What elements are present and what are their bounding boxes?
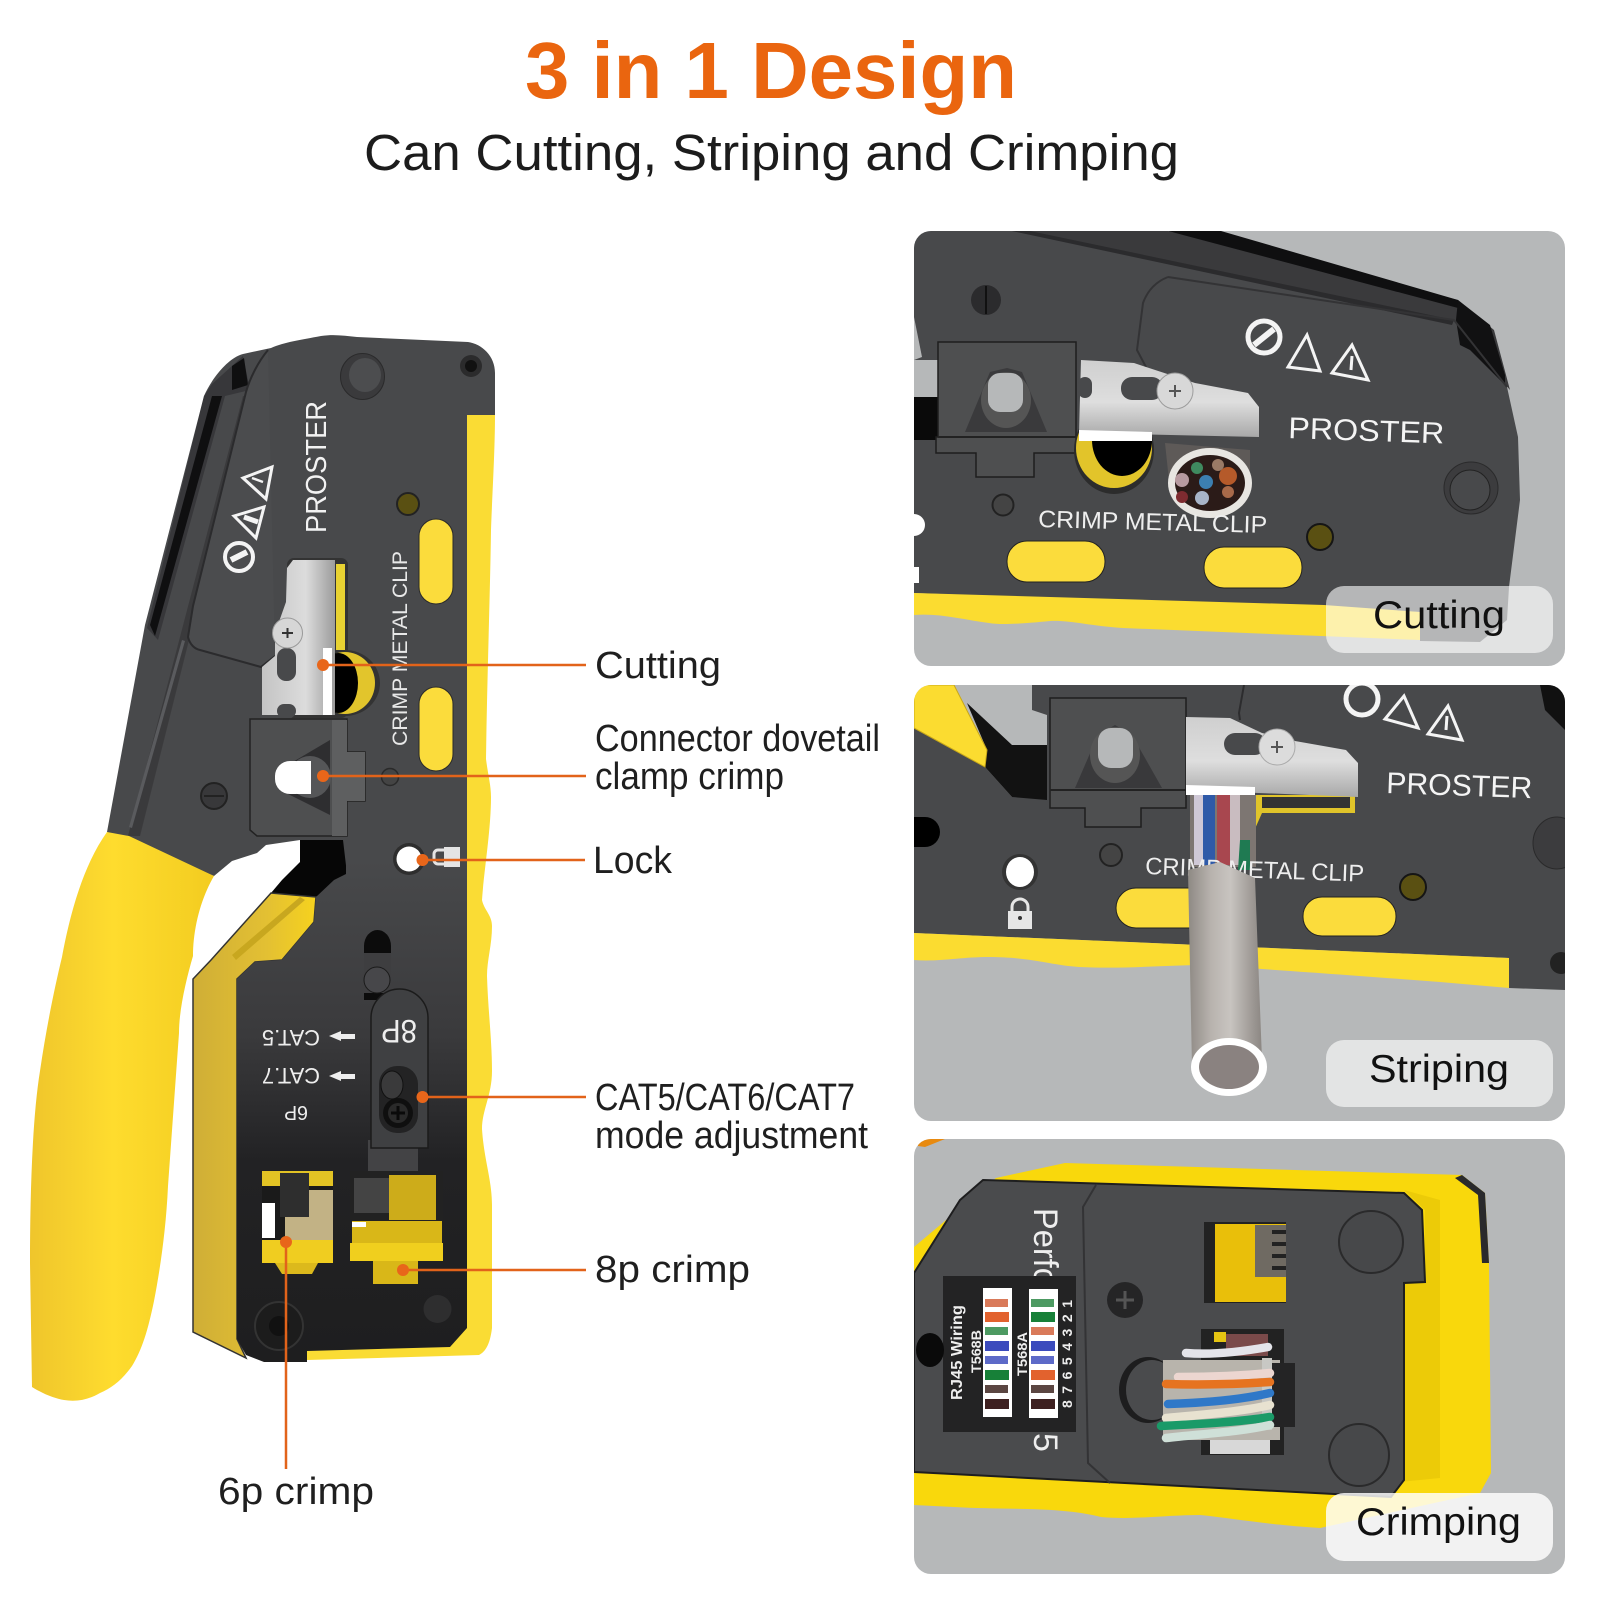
rivet: [340, 354, 384, 400]
main tool illustration: [30, 335, 495, 1401]
label pill: [1326, 1040, 1553, 1107]
upper port: [1204, 1222, 1286, 1303]
lower body panel: [237, 860, 467, 1362]
screw: [971, 285, 1001, 315]
yellow oval windows: [419, 519, 453, 771]
callout: lock: Lock: [593, 840, 673, 882]
yellow oval windows: [1007, 541, 1302, 588]
subtitle: Can Cutting, Striping and Crimping: [364, 124, 1179, 181]
panel: striping: [900, 683, 1581, 1121]
label pill: Striping: [1369, 1048, 1509, 1091]
CRIMP METAL CLIP text: CRIMP METAL CLIP: [389, 551, 412, 746]
CAT labels: [262, 1025, 355, 1123]
small top screw: [460, 355, 482, 377]
title: 3 in 1 Design: [525, 26, 1017, 115]
CRIMP METAL CLIP text: CRIMP METAL CLIP: [1145, 853, 1365, 888]
dark plate: [914, 1180, 1425, 1497]
screw: [1107, 1282, 1143, 1318]
label pill: Crimping: [1356, 1501, 1521, 1544]
adjustment slot: [364, 930, 391, 1000]
PROSTER brand: PROSTER: [301, 401, 333, 533]
yellow grip strip: [914, 593, 1420, 640]
black channel: [271, 840, 347, 897]
CAT labels: 6P: [284, 1101, 308, 1123]
CAT labels: CAT.5: [262, 1025, 320, 1050]
CAT labels: CAT.7: [262, 1063, 320, 1088]
yellow oval windows: [1116, 888, 1396, 936]
callout: connector dovetail clamp crimp: Connector dovetail: [595, 718, 880, 760]
wiring label: RJ45 Wiring: [949, 1305, 966, 1400]
wiring label: 8 7 6 5 4 3 2 1: [1059, 1300, 1075, 1408]
olive hole: [397, 493, 419, 515]
dovetail clamp block: [250, 719, 365, 836]
panel: cutting: [903, 231, 1565, 666]
label pill: Cutting: [1373, 594, 1505, 637]
small holes and rivet: [903, 462, 1498, 583]
8P slider: 8P: [381, 1013, 417, 1049]
handle: [30, 832, 214, 1401]
callout: 8p crimp: [397, 1249, 750, 1291]
PROSTER brand: PROSTER: [1386, 767, 1533, 805]
callout: lock: [416, 840, 673, 882]
dovetail block: [1050, 698, 1186, 827]
blade: [1078, 360, 1259, 441]
wiring label: [943, 1276, 1076, 1432]
PROSTER brand: PROSTER: [1288, 412, 1445, 450]
tool upper body: [107, 335, 495, 900]
callout: 6p crimp: [218, 1236, 374, 1513]
wiring label: T568B: [968, 1330, 984, 1373]
dovetail block: [936, 342, 1076, 477]
rivets: [1329, 1211, 1403, 1486]
blade: [1186, 717, 1358, 826]
8P slider: [368, 989, 428, 1175]
lock hole and icon: [393, 843, 460, 875]
wiring label: T568A: [1014, 1332, 1030, 1376]
vertical digit: 5: [1026, 1433, 1064, 1452]
callout: connector dovetail clamp crimp: clamp crimp: [595, 756, 784, 798]
vertical text: Perfc: [1026, 1208, 1064, 1284]
callout: connector dovetail clamp crimp: [317, 718, 880, 798]
callout: mode adjustment: CAT5/CAT6/CAT7: [595, 1077, 855, 1119]
callout: cutting: [317, 645, 721, 687]
lower port with wires: [1119, 1329, 1295, 1455]
right yellow grip: [307, 415, 495, 1360]
label pill: [1326, 586, 1553, 653]
small holes and rivets: [900, 817, 1581, 974]
cable: [1188, 862, 1267, 1096]
cable end: [1165, 443, 1252, 518]
CRIMP METAL CLIP text: CRIMP METAL CLIP: [1038, 506, 1267, 539]
bottom rivets: [255, 1295, 452, 1350]
6p crimp port: [262, 1171, 333, 1274]
panel: crimping: [914, 1139, 1565, 1574]
yellow left housing: [193, 893, 316, 1358]
warning icons: [225, 467, 272, 571]
warning icons: [1248, 321, 1368, 380]
cutting blade and hole: [262, 560, 380, 718]
left hole: [916, 1333, 944, 1367]
callout: mode adjustment: mode adjustment: [595, 1115, 868, 1157]
yellow grip strip: [914, 933, 1509, 988]
8p crimp port: [350, 1171, 443, 1284]
callout: 8p crimp: 8p crimp: [595, 1249, 750, 1291]
stripped wires: [1190, 795, 1256, 870]
callout: cutting: Cutting: [595, 645, 721, 687]
callout: mode adjustment: [416, 1077, 868, 1157]
warning icons: [1346, 683, 1462, 740]
lock hole and icon: [1002, 854, 1038, 929]
small details: [201, 768, 398, 809]
housing slot shading: [232, 897, 305, 960]
hole behind blade: [1074, 429, 1154, 494]
callout: 6p crimp: 6p crimp: [218, 1471, 374, 1513]
label pill: [1326, 1493, 1553, 1561]
